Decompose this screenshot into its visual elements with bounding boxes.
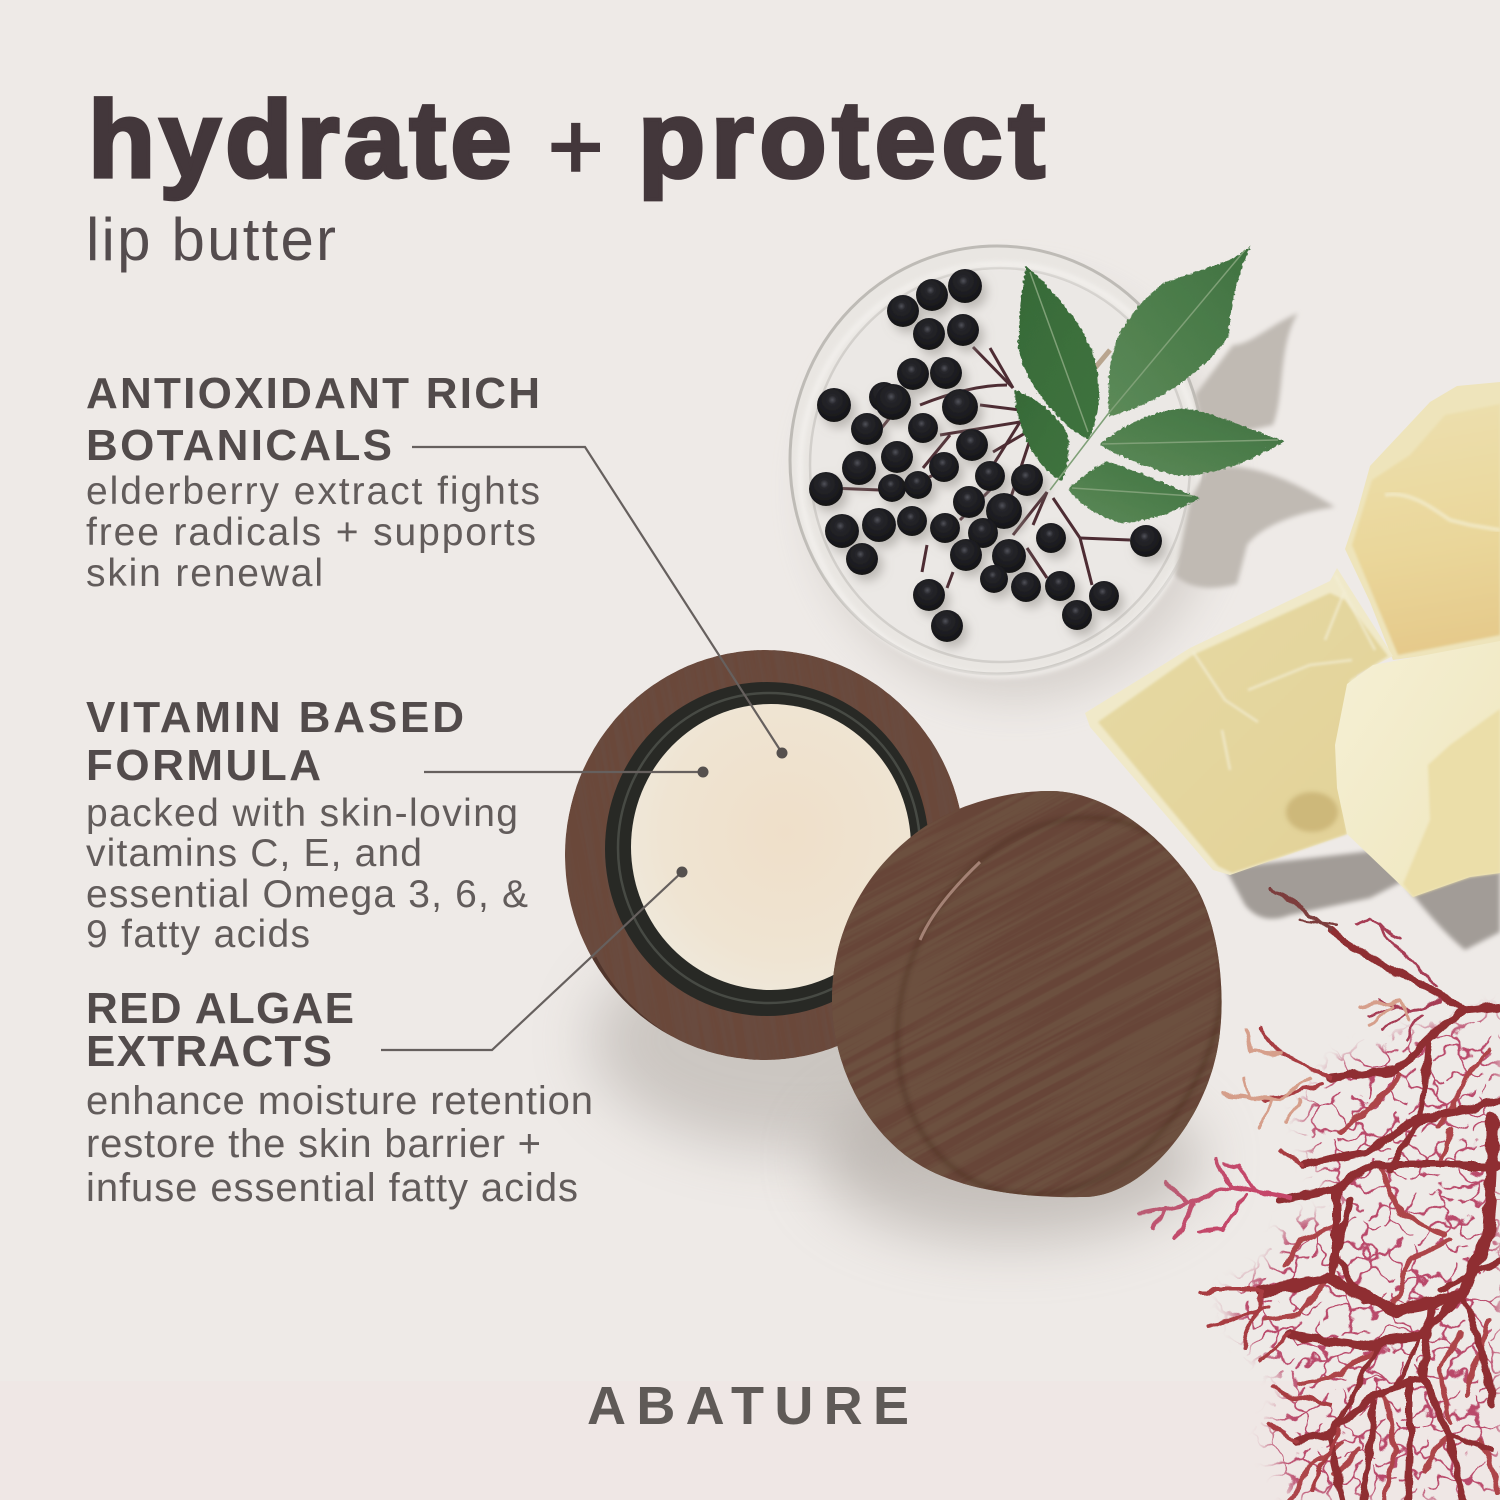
- body: red algae: restore the skin barrier +: [86, 1122, 541, 1166]
- ingredient: shea butter chunks: [1085, 382, 1500, 950]
- callout: antioxidant line: [412, 447, 788, 758]
- body: vitamin: vitamins C, E, and: [86, 832, 422, 875]
- stems: [830, 347, 1130, 588]
- chunk: top rim: [1345, 382, 1500, 660]
- stem stub: [1095, 350, 1110, 368]
- chunk: top body: [1352, 404, 1500, 655]
- algae: upper pink sprig: [1355, 918, 1440, 1040]
- text block: vitamin based formula: [86, 693, 528, 956]
- butter cast shadows: [1225, 850, 1500, 950]
- algae: mid-left red branches: [1200, 1026, 1340, 1490]
- algae: fine twig mesh: [1216, 1000, 1500, 1500]
- brand logo: ABATURE: [587, 1376, 909, 1436]
- callout: red algae line: [381, 866, 688, 1050]
- lid wood grain: [832, 791, 1222, 1198]
- body: antioxidant: elderberry extract fights: [86, 470, 540, 513]
- body: vitamin: [86, 792, 528, 956]
- ingredient: red algae: [1140, 890, 1500, 1500]
- jar black liner: [605, 682, 929, 1016]
- lip butter cream: [631, 704, 911, 990]
- footer band: [0, 1381, 1500, 1500]
- heading: red algae: EXTRACTS: [86, 1027, 332, 1076]
- title: +: [548, 94, 603, 200]
- text block: antioxidant rich botanicals: [86, 369, 540, 595]
- heading: red algae: RED ALGAE: [86, 984, 354, 1033]
- subtitle: lip butter: [86, 206, 336, 273]
- chunk: front facet: [1403, 709, 1500, 897]
- title: protect: [638, 79, 1045, 201]
- lid shadow: [820, 1080, 1200, 1240]
- heading: red algae: [86, 984, 354, 1076]
- lid face edge: [895, 816, 1222, 1196]
- heading: antioxidant: BOTANICALS: [86, 421, 392, 470]
- butter pit: [1286, 792, 1338, 832]
- product: wooden jar: [565, 650, 960, 1172]
- jar liner ridge: [618, 693, 920, 1003]
- jar wood ring: [565, 650, 960, 1060]
- algae: dark upper stem: [1273, 890, 1335, 931]
- jar shadow: [590, 930, 1010, 1150]
- leaf shadows: [1175, 313, 1335, 588]
- ingredient: elderberry dish: [790, 245, 1335, 702]
- heading: vitamin: FORMULA: [86, 741, 321, 790]
- wedge and cracks: [1193, 575, 1375, 770]
- lid body: [832, 791, 1222, 1198]
- heading: vitamin: [86, 693, 464, 790]
- body: vitamin: packed with skin-loving: [86, 792, 518, 835]
- body: vitamin: 9 fatty acids: [86, 913, 310, 956]
- chunk: top crack: [1385, 494, 1500, 530]
- lid edge highlight: [920, 862, 980, 940]
- heading: antioxidant: [86, 369, 540, 470]
- algae branches group: [1140, 890, 1500, 1500]
- body: vitamin: essential Omega 3, 6, &: [86, 873, 528, 916]
- chunk: middle rim: [1085, 568, 1393, 875]
- body: antioxidant: skin renewal: [86, 552, 323, 595]
- title: hydrate: [88, 79, 511, 201]
- body: red algae: enhance moisture retention: [86, 1079, 593, 1123]
- chunk: middle body: [1098, 593, 1388, 873]
- heading: vitamin: VITAMIN BASED: [86, 693, 464, 742]
- leaf veins: [1030, 250, 1278, 496]
- berries: [809, 269, 1162, 642]
- heading: antioxidant: ANTIOXIDANT RICH: [86, 369, 540, 418]
- body: red algae: infuse essential fatty acids: [86, 1166, 578, 1210]
- glass dish: [790, 246, 1204, 676]
- body: antioxidant: [86, 470, 540, 595]
- chunk: front light: [1335, 641, 1500, 897]
- callout: vitamin line: [424, 766, 708, 778]
- title: [88, 79, 1045, 201]
- body: red algae: [86, 1079, 593, 1210]
- body: antioxidant: free radicals + supports: [86, 511, 536, 554]
- algae: medium branches: [1265, 1050, 1500, 1500]
- product: wooden lid: [806, 791, 1222, 1266]
- algae: pink left branch: [1140, 1160, 1290, 1238]
- elderberry leaves: [1013, 245, 1283, 522]
- algae: thick trunks: [1263, 931, 1500, 1500]
- algae: tan branches: [1223, 1000, 1410, 1130]
- dish shadow: [810, 278, 1220, 702]
- text block: red algae extracts: [86, 984, 593, 1210]
